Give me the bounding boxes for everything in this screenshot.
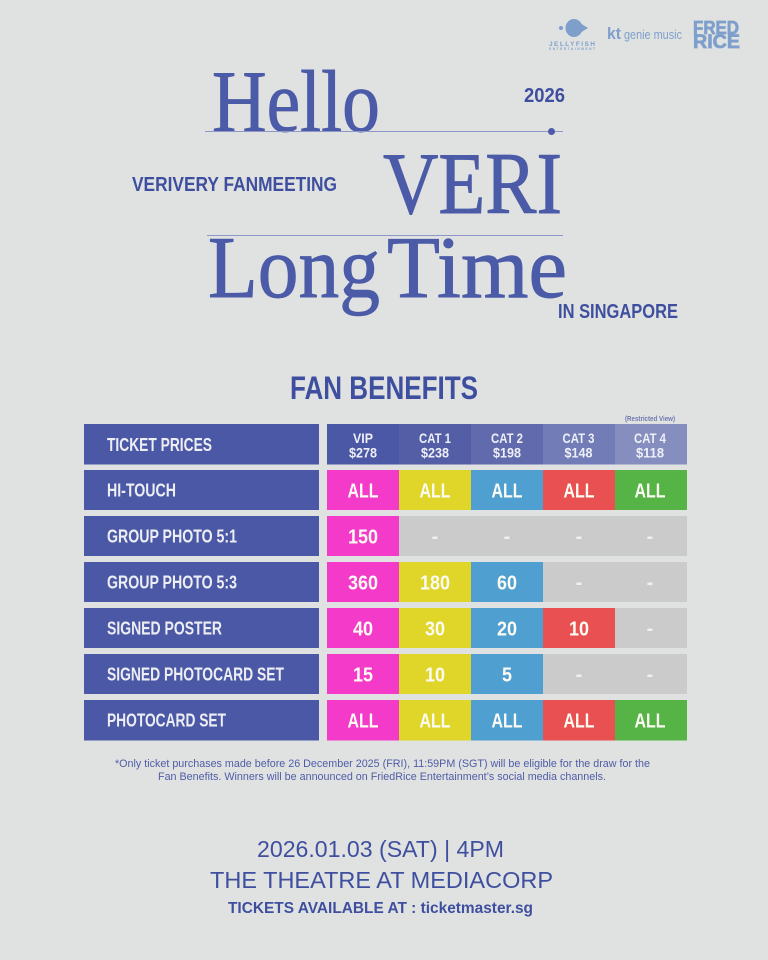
row: group photo 5:1: - — [647, 526, 653, 548]
row: ticket prices: $118 — [636, 444, 664, 460]
row: group photo 5:3: GROUP PHOTO 5:3 — [107, 572, 237, 592]
row: photocard set: ALL — [492, 710, 522, 732]
row: signed poster: SIGNED POSTER — [107, 618, 222, 638]
row: signed poster: 30 — [425, 618, 445, 640]
row: hi-touch: HI-TOUCH — [107, 480, 176, 500]
row: group photo 5:1: 150 — [348, 526, 378, 548]
row: signed photocard set: 15 — [353, 664, 373, 686]
row: ticket prices: $238 — [421, 444, 449, 460]
title: Hello: Hello — [212, 54, 380, 151]
title: Long Time: Time — [387, 220, 567, 317]
row: ticket prices: CAT 4 — [634, 430, 666, 446]
benefits table — [84, 424, 687, 740]
row: group photo 5:3: - — [576, 572, 582, 594]
row: ticket prices: CAT 3 — [562, 430, 595, 446]
logo: Jellyfish Entertainment: JELLYFISH — [549, 41, 595, 48]
row: ticket prices: CAT 2 — [491, 430, 523, 446]
row: signed poster: - — [647, 618, 653, 640]
row: photocard set: ALL — [348, 710, 378, 732]
row: signed photocard set: 5 — [502, 664, 512, 686]
row: ticket prices: TICKET PRICES — [107, 435, 212, 455]
row: signed photocard set: - — [647, 664, 653, 686]
row: group photo 5:1: - — [504, 526, 510, 548]
logo: Fried Rice — [693, 18, 740, 53]
event details — [210, 836, 553, 917]
row: photocard set: PHOTOCARD SET — [107, 710, 226, 730]
logo: Jellyfish Entertainment: ENTERTAINMENT — [549, 47, 595, 51]
row: group photo 5:1 — [84, 516, 687, 556]
footnote: *Only ticket purchases made before 26 December 2025 (FRI), 11:59PM (SGT) will be eligible for the draw for the — [115, 758, 650, 770]
row: signed poster: 20 — [497, 618, 517, 640]
row: signed poster: 40 — [353, 618, 373, 640]
row: group photo 5:3 — [84, 562, 687, 602]
venue: THE THEATRE AT MEDIACORP — [210, 867, 553, 893]
logo: kt genie music: kt — [607, 24, 621, 43]
row: group photo 5:1: - — [432, 526, 438, 548]
title lockup — [132, 54, 678, 323]
row: hi-touch: ALL — [492, 480, 522, 502]
row: hi-touch: ALL — [420, 480, 450, 502]
row: signed photocard set: - — [576, 664, 582, 686]
date and time: 2026.01.03 (SAT) | 4PM — [257, 836, 504, 862]
note: restricted view: (Restricted View) — [625, 416, 675, 423]
heading: Fan Benefits: FAN BENEFITS — [290, 370, 478, 406]
rule above Long Time — [207, 234, 563, 236]
row: signed photocard set — [84, 654, 687, 694]
logo: kt genie music: genie music — [624, 27, 682, 42]
row: hi-touch — [84, 470, 687, 510]
subtitle: IN SINGAPORE: IN SINGAPORE — [558, 301, 678, 323]
title: VERI: VERI — [383, 136, 562, 233]
row: ticket prices: $198 — [493, 444, 521, 460]
year: 2026 — [524, 85, 565, 107]
row: photocard set: ALL — [634, 710, 666, 732]
row: hi-touch: ALL — [634, 480, 666, 502]
row: signed poster — [84, 608, 687, 648]
logo: kt genie music — [607, 24, 682, 43]
row: photocard set: ALL — [420, 710, 450, 732]
row: group photo 5:3: 60 — [497, 572, 517, 594]
logo: Fried Rice: FRED — [693, 18, 739, 38]
ticket info: TICKETS AVAILABLE AT : ticketmaster.sg — [228, 900, 533, 917]
row: signed poster: 10 — [569, 618, 589, 640]
row: signed photocard set: SIGNED PHOTOCARD SET — [107, 664, 284, 684]
row: ticket prices: CAT 1 — [419, 430, 451, 446]
row: ticket prices: $278 — [349, 444, 377, 460]
row: hi-touch: ALL — [564, 480, 594, 502]
row: group photo 5:3: - — [647, 572, 653, 594]
row: hi-touch: ALL — [348, 480, 378, 502]
subtitle: VERIVERY FANMEETING: VERIVERY FANMEETING — [132, 174, 337, 196]
row: group photo 5:3: 180 — [420, 572, 450, 594]
logo: Fried Rice: RICE — [693, 32, 740, 53]
row: ticket prices — [84, 424, 687, 464]
row: group photo 5:3: 360 — [348, 572, 378, 594]
title: Long Time — [208, 220, 567, 317]
logos — [549, 18, 740, 53]
row: photocard set: ALL — [564, 710, 594, 732]
rule with dot under Hello — [205, 128, 563, 135]
row: group photo 5:1: - — [576, 526, 582, 548]
title: Long Time: Long — [208, 220, 380, 317]
row: photocard set — [84, 700, 687, 740]
row: group photo 5:1: GROUP PHOTO 5:1 — [107, 526, 237, 546]
footnote: Fan Benefits. Winners will be announced on FriedRice Entertainment’s social media channels. — [158, 771, 606, 783]
row: ticket prices: VIP — [353, 430, 373, 446]
logo: Jellyfish Entertainment — [549, 19, 595, 51]
row: ticket prices: $148 — [564, 444, 593, 460]
footnote — [115, 758, 650, 783]
row: signed photocard set: 10 — [425, 664, 445, 686]
